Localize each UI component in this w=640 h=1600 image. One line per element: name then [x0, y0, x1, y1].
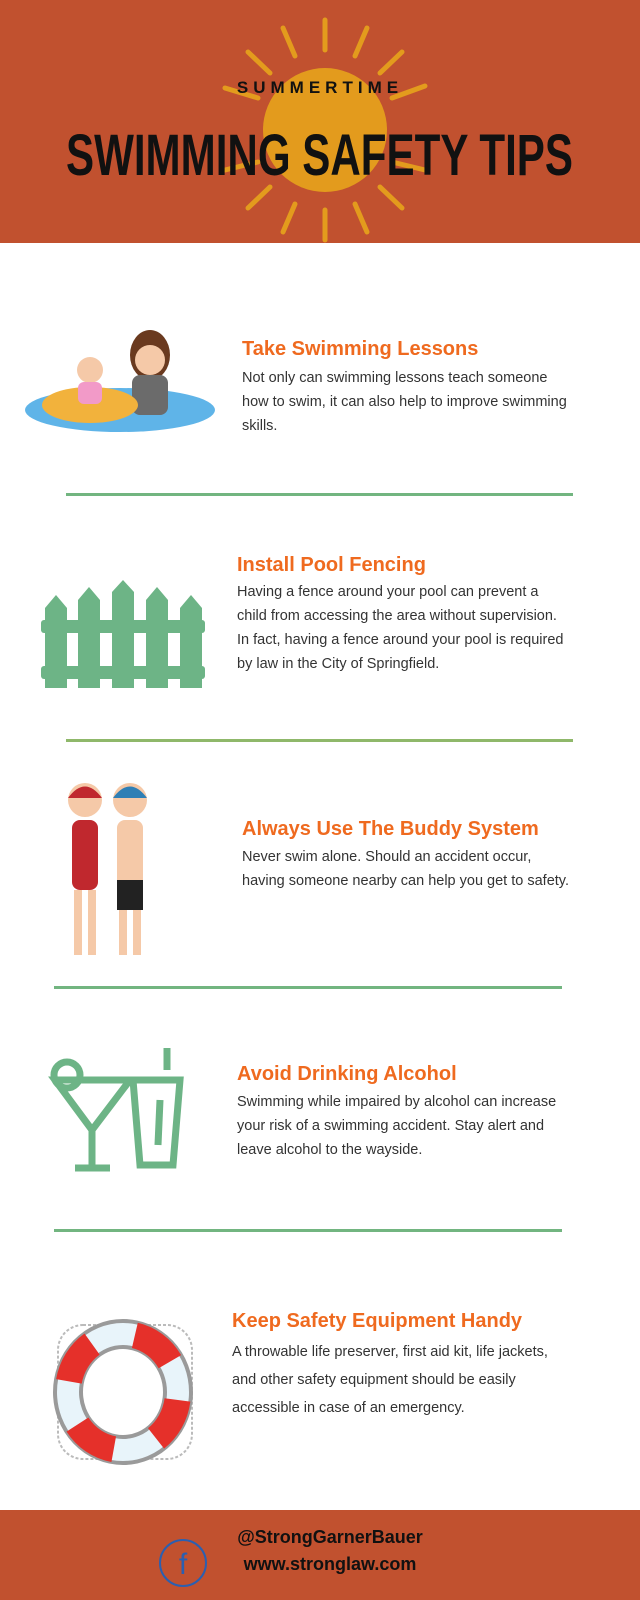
body text: having someone nearby can help you get to safety. [242, 873, 569, 889]
body text: by law in the City of Springfield. [237, 656, 439, 672]
body text: accessible in case of an emergency. [232, 1400, 465, 1416]
body text: and other safety equipment should be easily [232, 1372, 516, 1388]
section 4: alcohol [48, 1048, 556, 1172]
icon: facebook [159, 1539, 207, 1587]
icon: fence [41, 580, 205, 688]
body text [232, 1344, 548, 1416]
body text [237, 584, 563, 672]
contact text: @StrongGarnerBauer [237, 1527, 423, 1547]
heading: Avoid Drinking Alcohol [237, 1063, 457, 1085]
section 2: fencing [41, 554, 563, 688]
contact text: www.stronglaw.com [244, 1554, 416, 1574]
body text [242, 849, 569, 889]
icon: cocktail and drink [48, 1048, 184, 1172]
body text: how to swim, it can also help to improve swimming [242, 394, 567, 410]
section 3: buddy system [68, 783, 569, 955]
body text [242, 370, 567, 434]
body text: Not only can swimming lessons teach someone [242, 370, 547, 386]
body text: skills. [242, 418, 277, 434]
body text: your risk of a swimming accident. Stay alert and [237, 1118, 544, 1134]
body text: In fact, having a fence around your pool is required [237, 632, 563, 648]
heading: Keep Safety Equipment Handy [232, 1310, 522, 1332]
icon: two swimmers [68, 783, 147, 955]
body text [237, 1094, 556, 1158]
body text: A throwable life preserver, first aid kit, life jackets, [232, 1344, 548, 1360]
icon: mother and child in pool [25, 330, 215, 432]
heading: Always Use The Buddy System [242, 818, 539, 840]
body text: child from accessing the area without supervision. [237, 608, 557, 624]
body text: Having a fence around your pool can prevent a [237, 584, 538, 600]
body text: leave alcohol to the wayside. [237, 1142, 422, 1158]
heading: Install Pool Fencing [237, 554, 426, 576]
footer [0, 1510, 640, 1600]
subtitle: SUMMERTIME [237, 78, 403, 97]
heading: Take Swimming Lessons [242, 338, 478, 360]
body text: Swimming while impaired by alcohol can increase [237, 1094, 556, 1110]
icon: life ring [53, 1319, 193, 1465]
icon: sun [225, 20, 425, 240]
header banner [0, 0, 640, 243]
icon: facebook: f [179, 1548, 188, 1581]
contact text [237, 1527, 423, 1574]
section 5: safety equipment [53, 1310, 548, 1465]
body text: Never swim alone. Should an accident occur, [242, 849, 531, 865]
section 1: lessons [25, 330, 567, 434]
